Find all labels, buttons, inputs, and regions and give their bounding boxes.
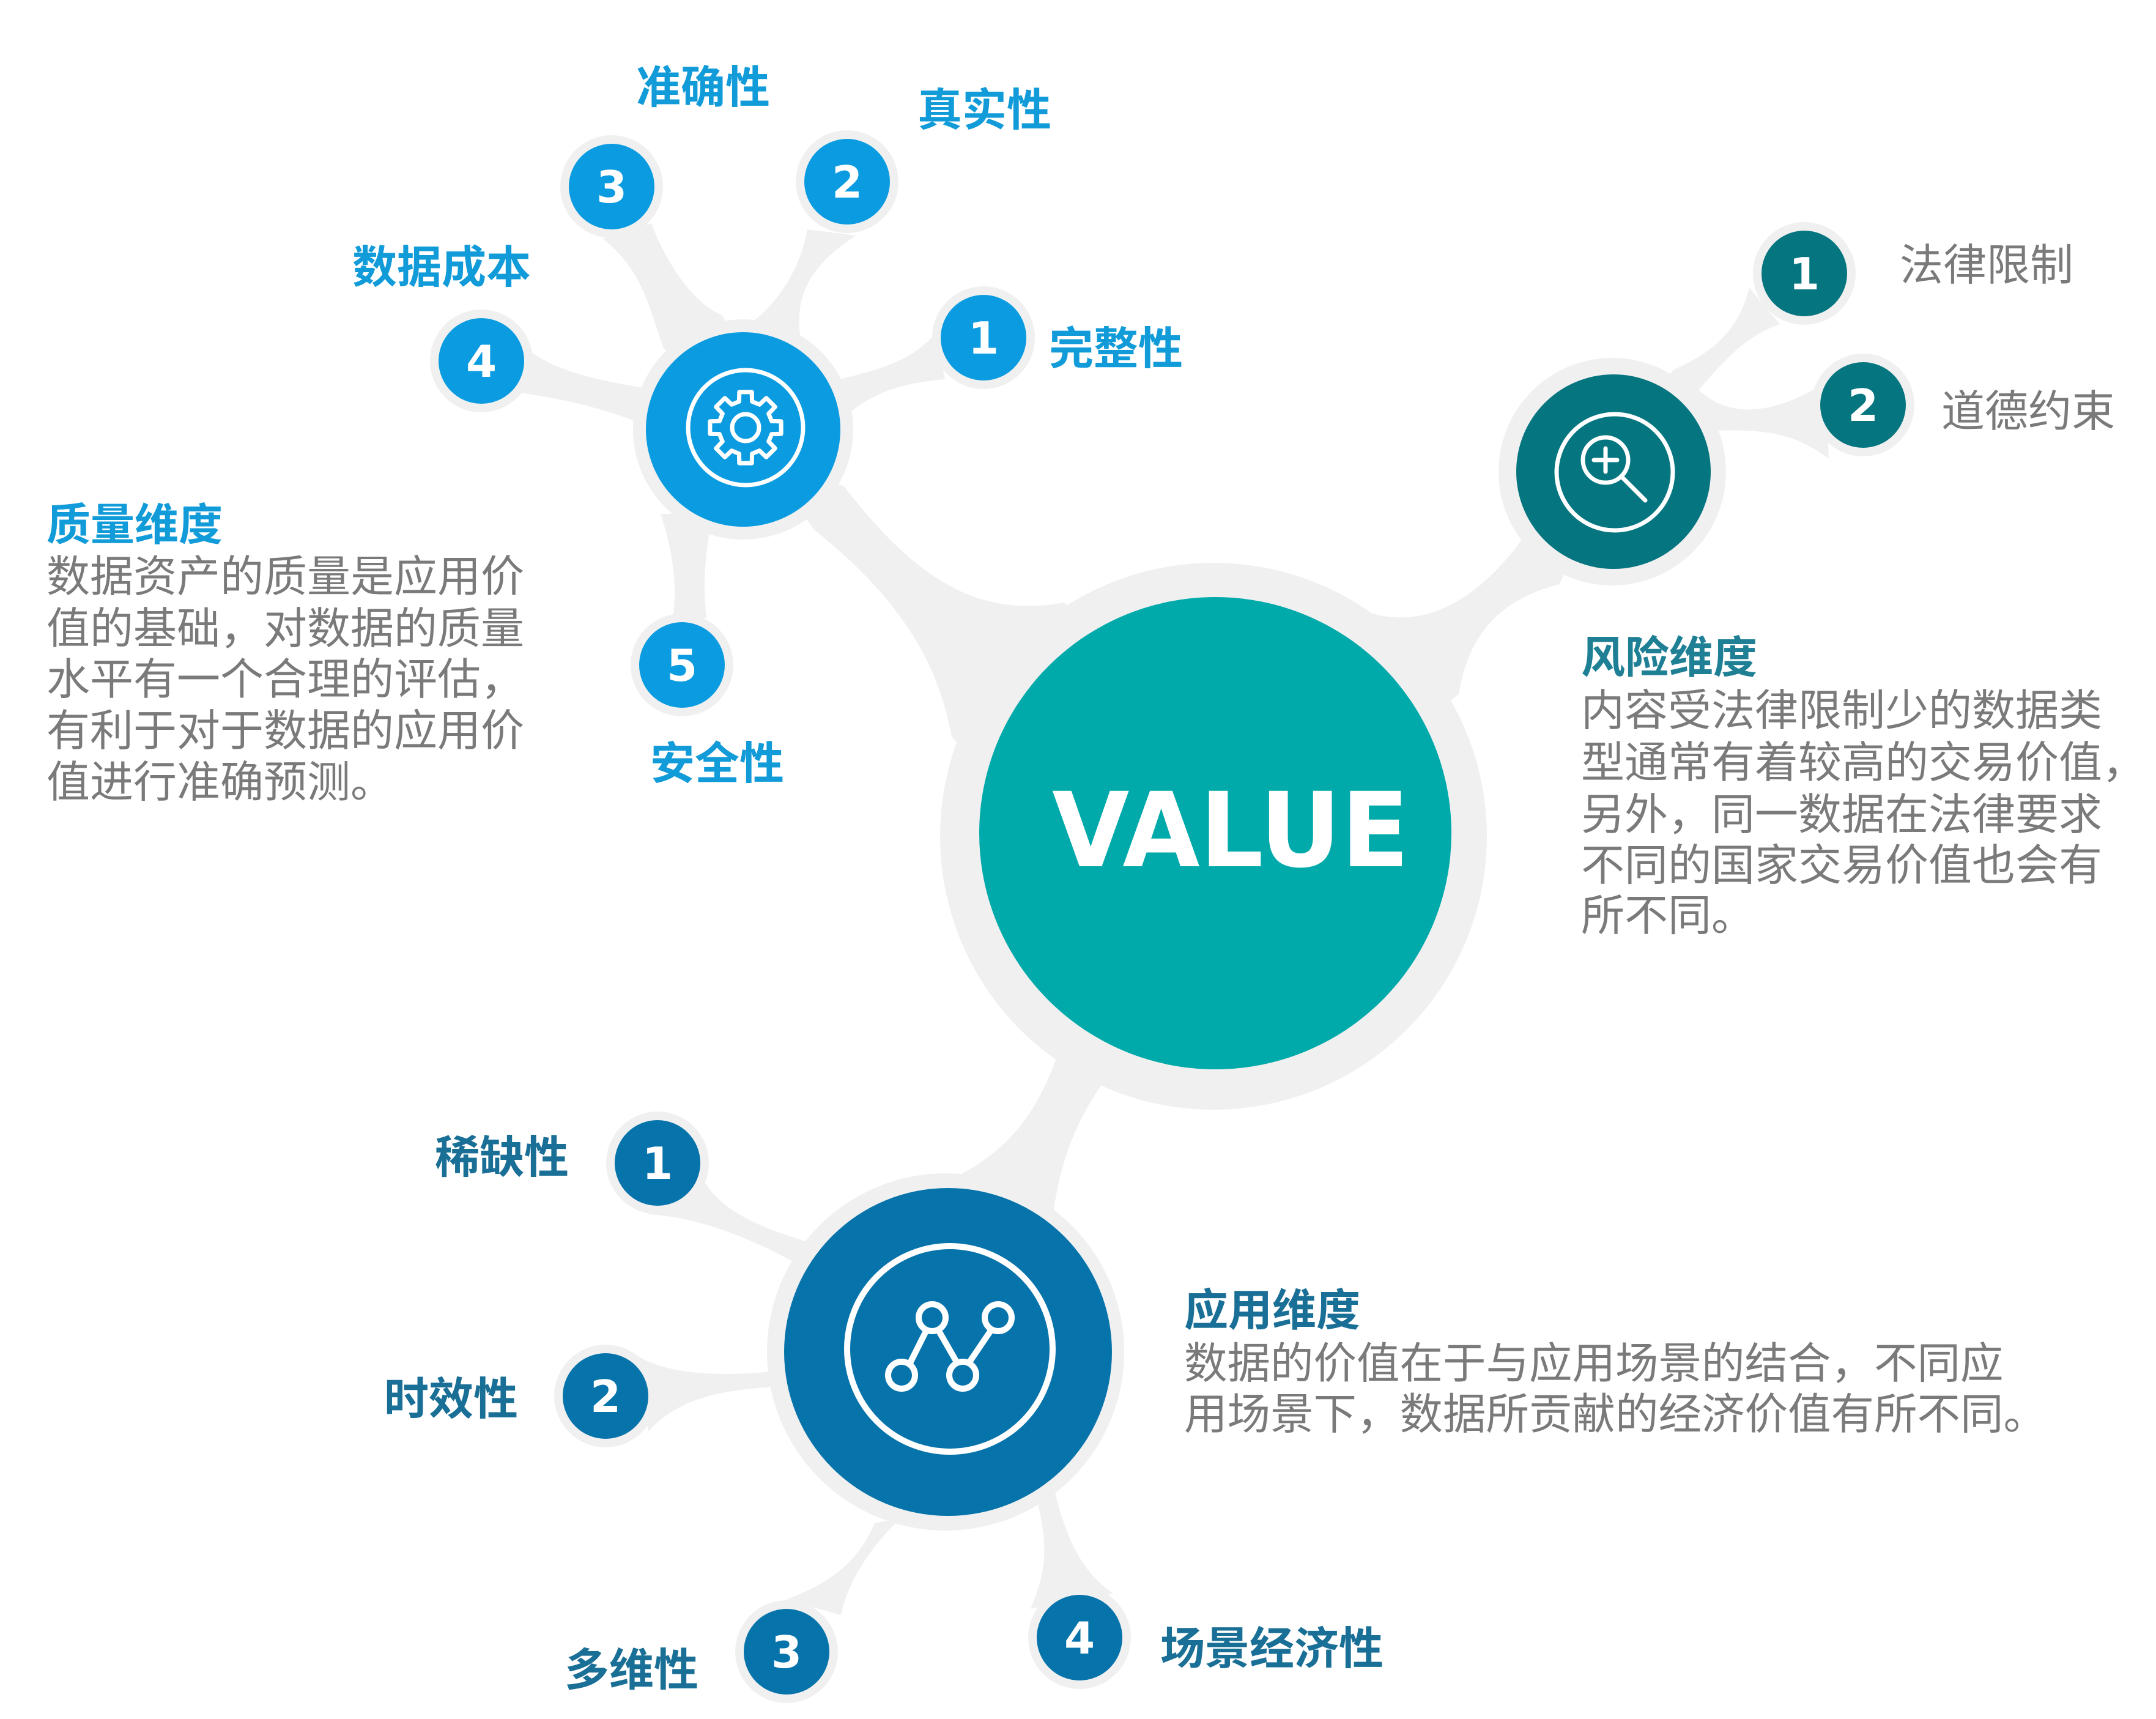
text block: risk description: 内容受法律限制少的数据类: [1581, 687, 2102, 735]
text block: quality description: 水平有一个合理的评估，: [46, 656, 524, 704]
item 4 场景经济性: 场景经济性: [1160, 1624, 1384, 1674]
item 3 准确性: [560, 63, 770, 238]
item 4 数据成本: 4: [466, 336, 497, 387]
item 3 多维性: [565, 1600, 838, 1703]
text block: quality description: 值进行准确预测。: [46, 759, 394, 807]
text block: quality description: 有利于对于数据的应用价: [46, 707, 524, 756]
text block: quality description: 值的基础，对数据的质量: [46, 605, 524, 653]
text block: risk description: 所不同。: [1581, 892, 1755, 940]
item 3 准确性: 准确性: [636, 63, 770, 113]
item 2 真实性: [796, 86, 1051, 233]
text block: application description: 数据的价值在于与应用场景的结合，不同应: [1184, 1339, 2004, 1387]
item 2 道德约束: 2: [1848, 380, 1878, 431]
item 1 完整性: 完整性: [1049, 324, 1183, 374]
item 1 完整性: 1: [968, 313, 999, 364]
connector: value to application hub: [942, 1040, 1101, 1223]
text block: application description: 用场景下，数据所贡献的经济价值有所不同。: [1184, 1390, 2047, 1438]
item 5 安全性: 安全性: [650, 739, 784, 789]
central VALUE circle: [940, 563, 1487, 1110]
connector: value to quality hub: [765, 459, 1113, 789]
item 4 数据成本: [352, 243, 533, 412]
panel: risk dimension: [1333, 222, 2146, 940]
item 3 多维性: 多维性: [565, 1646, 698, 1695]
item 4 场景经济性: 4: [1064, 1613, 1095, 1664]
quality hub halo: [633, 319, 853, 540]
icon: line chart: [847, 1246, 1053, 1452]
title: VALUE: VALUE: [1052, 770, 1409, 891]
item 1 法律限制: 1: [1789, 248, 1820, 300]
panel: quality dimension: [46, 63, 1183, 807]
item 5 安全性: 5: [667, 640, 697, 691]
item 1 法律限制: [1753, 222, 2073, 325]
item 2 时效性: 时效性: [384, 1375, 518, 1424]
item 2 时效性: [384, 1345, 657, 1447]
item 3 准确性: 3: [596, 162, 627, 213]
item 4 场景经济性: [1028, 1586, 1384, 1689]
quality hub circle: [646, 332, 840, 527]
icon: gear: [688, 370, 803, 485]
text block: risk description: 不同的国家交易价值也会有: [1581, 842, 2102, 890]
item 1 完整性: [932, 286, 1183, 389]
application hub halo: [767, 1173, 1124, 1531]
application hub circle: [784, 1188, 1112, 1516]
icon: magnifier: [1557, 414, 1673, 530]
text block: risk description: 另外，同一数据在法律要求: [1581, 791, 2102, 839]
connector: risk branches: [1651, 288, 1829, 459]
item 1 稀缺性: 稀缺性: [435, 1133, 569, 1183]
connector: quality branches: [514, 223, 945, 618]
heading: 质量维度: 质量维度: [46, 501, 223, 550]
item 1 稀缺性: [435, 1112, 709, 1214]
heading: 应用维度: 应用维度: [1184, 1286, 1360, 1335]
risk hub halo: [1498, 358, 1726, 585]
text block: quality description: 数据资产的质量是应用价: [46, 553, 524, 601]
item 3 多维性: 3: [771, 1627, 802, 1678]
item 2 真实性: 真实性: [917, 86, 1051, 135]
panel: application dimension: [384, 1040, 2047, 1703]
connector: value to risk hub: [1333, 526, 1584, 734]
item 2 时效性: 2: [590, 1371, 621, 1422]
item 5 安全性: [631, 614, 784, 789]
item 2 道德约束: 道德约束: [1941, 388, 2115, 436]
item 1 稀缺性: 1: [642, 1138, 673, 1189]
risk hub circle: [1516, 374, 1711, 569]
item 1 法律限制: 法律限制: [1900, 242, 2073, 290]
heading: 风险维度: 风险维度: [1581, 634, 1757, 683]
item 2 道德约束: [1812, 354, 2115, 456]
item 4 数据成本: 数据成本: [352, 243, 531, 292]
text block: risk description: 型通常有着较高的交易价值，: [1581, 739, 2146, 787]
connector: application branches: [636, 1175, 1113, 1615]
item 2 真实性: 2: [832, 157, 862, 208]
